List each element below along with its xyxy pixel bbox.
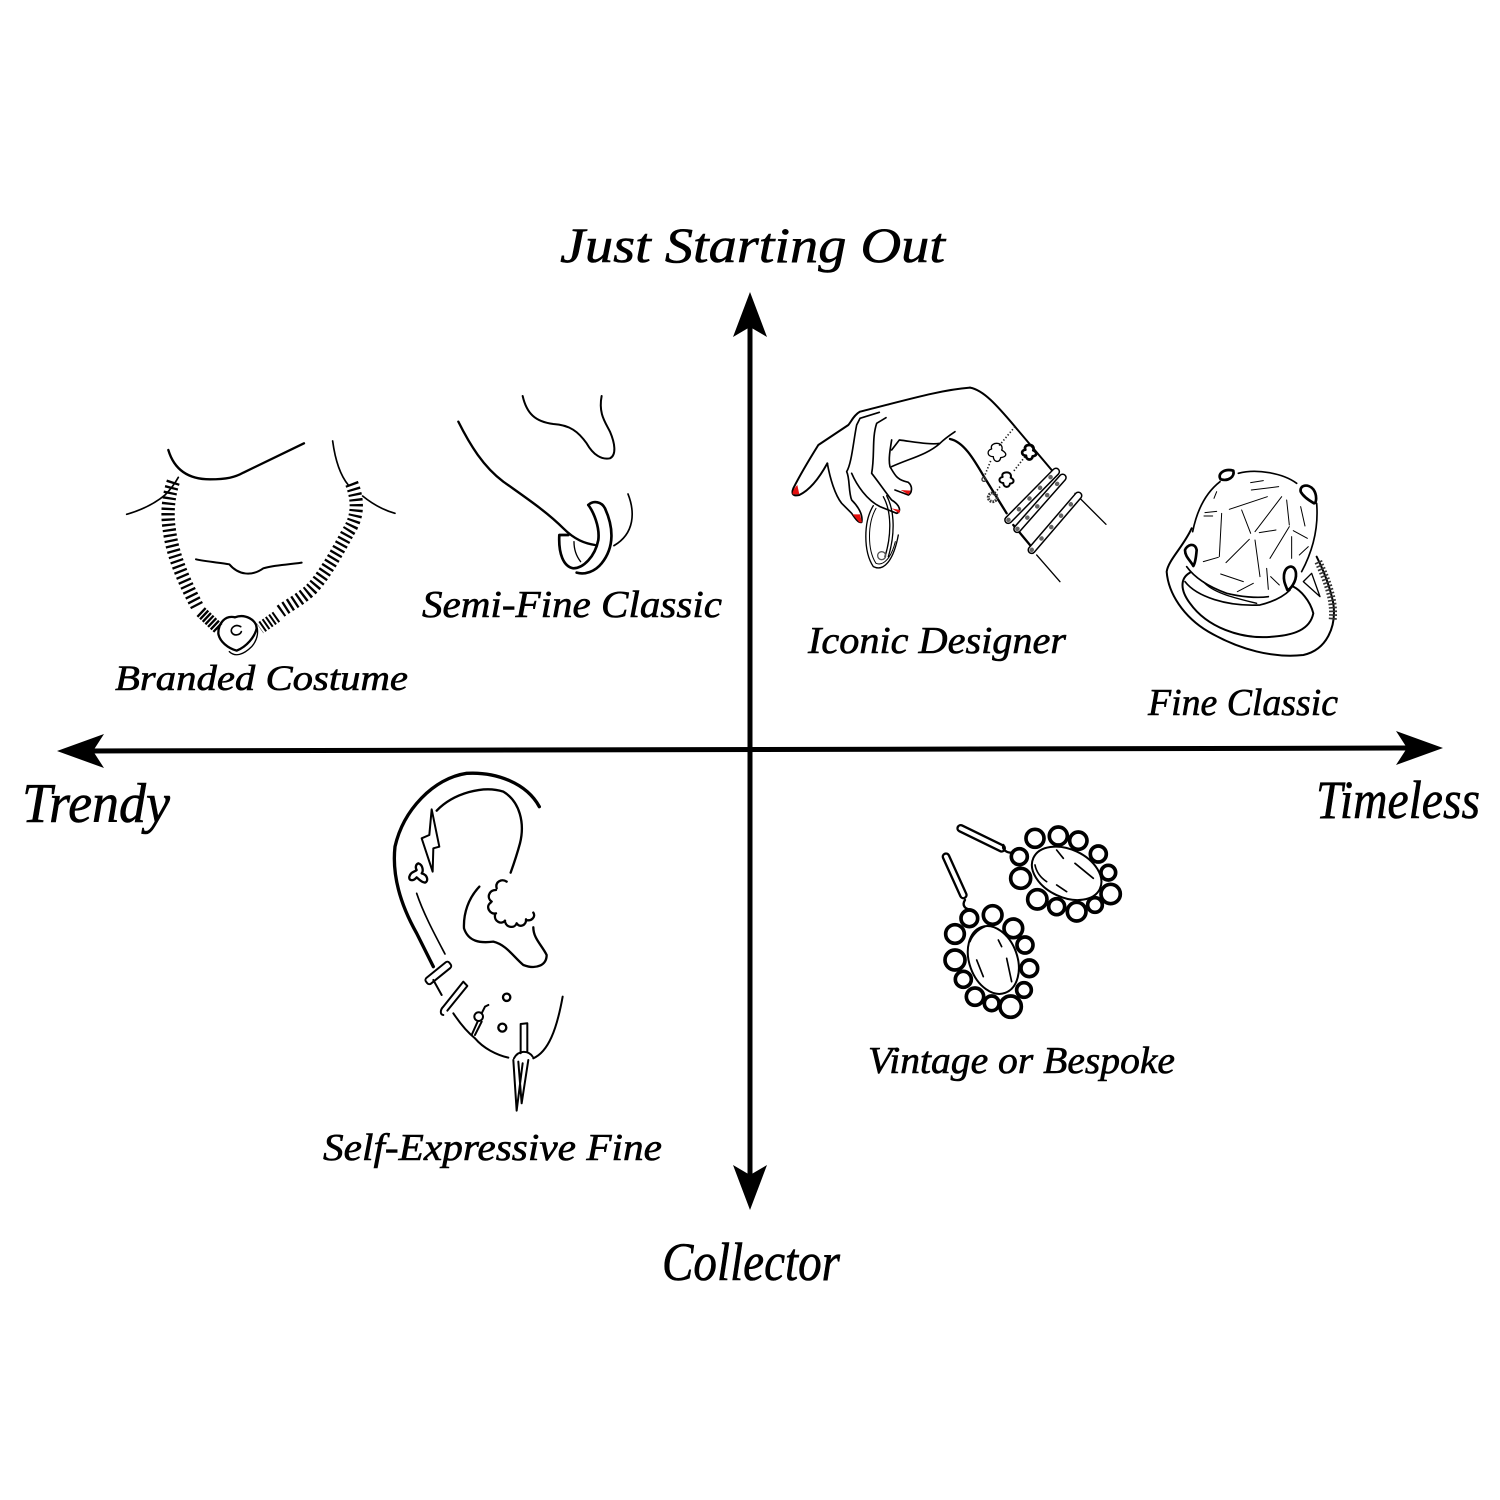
axis label: Timeless: Timeless: [1316, 770, 1480, 830]
beads: left strand: [168, 482, 197, 607]
heart pendant: [218, 616, 257, 651]
label: Branded Costume: Branded Costume: [115, 658, 408, 698]
pave stones: [1318, 562, 1333, 620]
red nails: [793, 485, 799, 494]
spike earring: [514, 997, 563, 1058]
label: Self-Expressive Fine: Self-Expressive Fine: [323, 1127, 662, 1169]
illustration: pierced ear: [394, 773, 563, 1111]
illustration: hoop earring on ear lobe: [458, 396, 632, 573]
illustration: hand with bracelets: [792, 388, 1106, 582]
axis label: Just Starting Out: Just Starting Out: [560, 217, 946, 273]
facets: [1203, 481, 1308, 592]
horizontal axis arrow: Trendy to Timeless: [57, 731, 1443, 768]
label: Fine Classic: Fine Classic: [1147, 682, 1338, 724]
label: Iconic Designer: Iconic Designer: [807, 620, 1066, 662]
stone outline: [1187, 471, 1317, 597]
lobe rings: [424, 961, 452, 985]
label: Vintage or Bespoke: Vintage or Bespoke: [868, 1040, 1175, 1082]
upper earring: [961, 827, 1120, 921]
beaded hoop: [488, 880, 534, 927]
illustration: necklace: [127, 441, 395, 655]
prongs: [1220, 470, 1234, 480]
beads: right strand: [280, 483, 356, 612]
illustration: cocktail ring: [1167, 470, 1334, 656]
conch: [464, 887, 547, 967]
stud bangles: [1008, 472, 1078, 550]
lower earring: [945, 857, 1038, 1017]
axis label: Collector: Collector: [662, 1232, 841, 1292]
trefoil stud: [409, 863, 427, 883]
band: [1167, 528, 1334, 656]
hoop held in fingers: [866, 506, 898, 568]
illustration: vintage drop earrings: [945, 827, 1120, 1017]
axis label: Trendy: Trendy: [22, 773, 170, 835]
label: Semi-Fine Classic: Semi-Fine Classic: [422, 584, 722, 626]
vertical axis arrow: Just Starting Out to Collector: [733, 292, 767, 1210]
lightning bolt stud: [422, 809, 439, 872]
clover station bracelet: [983, 427, 1025, 495]
